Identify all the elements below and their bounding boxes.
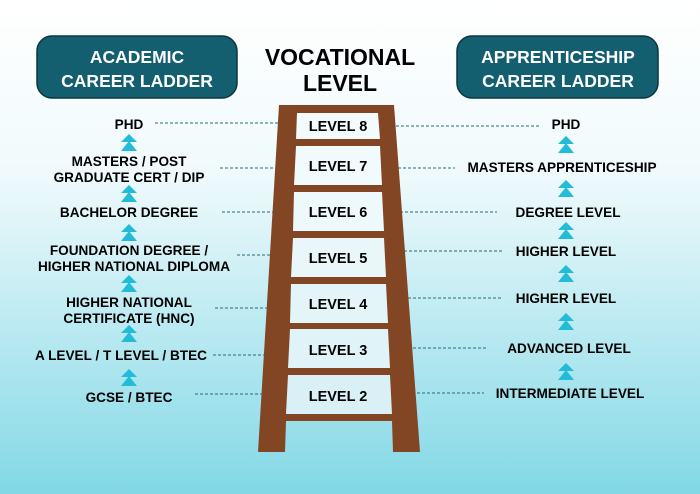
apprenticeship column: PHD: [552, 117, 581, 132]
apprenticeship column: MASTERS APPRENTICESHIP: [467, 160, 657, 175]
ladder: LEVEL 2: [309, 389, 367, 405]
academic column: MASTERS / POST: [72, 154, 187, 169]
apprenticeship column: HIGHER LEVEL: [516, 244, 616, 259]
academic column: HIGHER NATIONAL: [66, 295, 192, 310]
title: LEVEL: [303, 70, 377, 96]
apprenticeship column: ADVANCED LEVEL: [507, 341, 631, 356]
apprenticeship column: DEGREE LEVEL: [516, 205, 620, 220]
academic column: PHD: [115, 117, 144, 132]
ladder: LEVEL 6: [309, 205, 367, 221]
academic column: GCSE / BTEC: [86, 390, 173, 405]
academic column: GRADUATE CERT / DIP: [54, 170, 204, 185]
header: academic: ACADEMIC: [90, 47, 185, 67]
academic column: BACHELOR DEGREE: [60, 205, 198, 220]
ladder: LEVEL 5: [309, 251, 367, 267]
academic column: CERTIFICATE (HNC): [63, 311, 195, 326]
ladder: [258, 105, 420, 452]
ladder: LEVEL 4: [309, 297, 367, 313]
title: [265, 44, 415, 96]
dashed connector lines: [155, 123, 540, 394]
title: VOCATIONAL: [265, 44, 415, 70]
header: apprenticeship: CAREER LADDER: [482, 71, 634, 91]
apprenticeship column: HIGHER LEVEL: [516, 291, 616, 306]
ladder: LEVEL 3: [309, 343, 367, 359]
ladder: LEVEL 8: [309, 119, 367, 135]
academic column: HIGHER NATIONAL DIPLOMA: [38, 259, 230, 274]
header: academic: [37, 36, 237, 98]
apprenticeship column: INTERMEDIATE LEVEL: [496, 386, 644, 401]
ladder: LEVEL 7: [309, 159, 367, 175]
apprenticeship column: [467, 117, 657, 401]
header: apprenticeship: APPRENTICESHIP: [481, 47, 635, 67]
academic column: [35, 117, 230, 405]
header: apprenticeship: [457, 36, 658, 98]
academic column: FOUNDATION DEGREE /: [50, 243, 208, 258]
header: academic: CAREER LADDER: [61, 71, 213, 91]
academic column: A LEVEL / T LEVEL / BTEC: [35, 348, 207, 363]
